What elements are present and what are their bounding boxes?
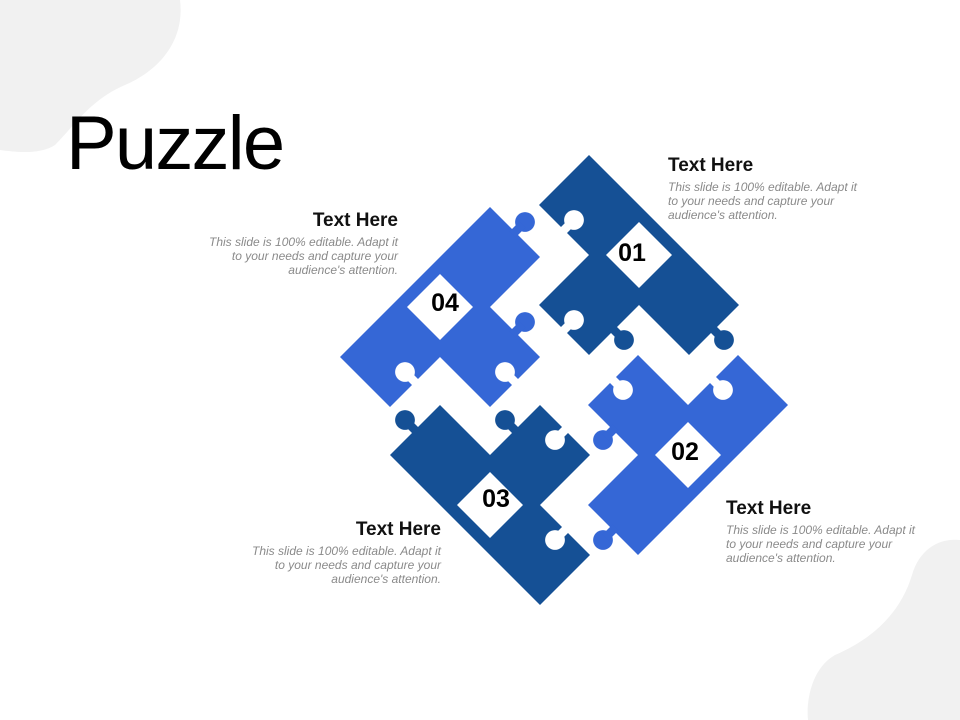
piece 01 bbox=[486, 155, 756, 424]
text: to your needs and capture your bbox=[726, 537, 892, 551]
text block 03: audience's attention. bbox=[331, 572, 441, 586]
piece 04 bbox=[340, 190, 610, 460]
text block 01 bbox=[668, 155, 858, 222]
title: Puzzle bbox=[66, 101, 283, 186]
piece 02 bbox=[518, 302, 788, 572]
text: to your needs and capture your bbox=[668, 194, 834, 208]
numbers: 02 bbox=[671, 438, 699, 466]
text: audience's attention. bbox=[726, 551, 836, 565]
numbers: 01 bbox=[618, 239, 646, 267]
text block 04: to your needs and capture your bbox=[232, 249, 398, 263]
text: This slide is 100% editable. Adapt it bbox=[668, 180, 857, 194]
numbers: 04 bbox=[431, 289, 459, 317]
text block 04: audience's attention. bbox=[288, 263, 398, 277]
text block 03: to your needs and capture your bbox=[275, 558, 441, 572]
text block 03 bbox=[252, 519, 442, 586]
text: Text Here bbox=[726, 498, 811, 519]
text block 04: Text Here bbox=[313, 210, 398, 231]
text: audience's attention. bbox=[668, 208, 778, 222]
numbers: 03 bbox=[482, 485, 510, 513]
text: This slide is 100% editable. Adapt it bbox=[726, 523, 915, 537]
text block 04: This slide is 100% editable. Adapt it bbox=[209, 235, 398, 249]
text block 03: This slide is 100% editable. Adapt it bbox=[252, 544, 441, 558]
numbers bbox=[431, 239, 699, 513]
text: Text Here bbox=[668, 155, 753, 176]
piece 03 bbox=[373, 336, 642, 605]
text block 03: Text Here bbox=[356, 519, 441, 540]
text block 04 bbox=[209, 210, 398, 277]
text block 02 bbox=[726, 498, 916, 565]
